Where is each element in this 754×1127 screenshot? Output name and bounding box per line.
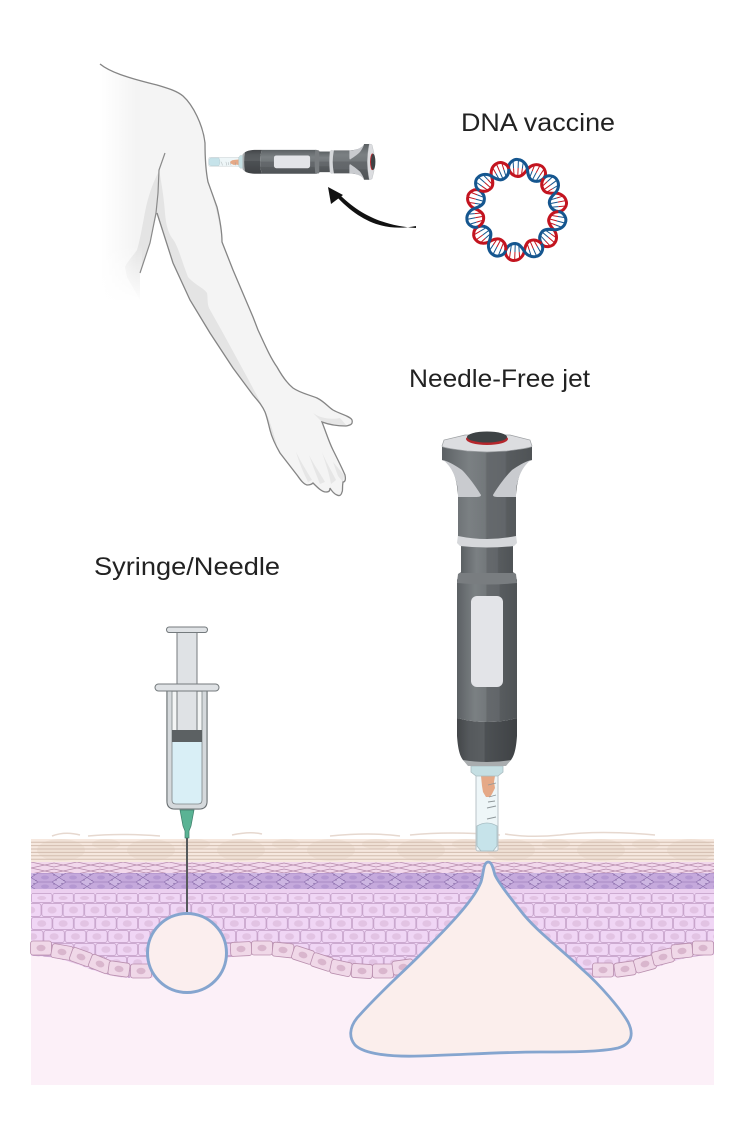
needle hub (180, 810, 194, 838)
label: Syringe/Needle: Syringe/Needle (94, 553, 280, 581)
torso shading (125, 173, 158, 300)
liquid (172, 742, 202, 804)
nozzle collar (471, 766, 503, 776)
torso left fade (92, 60, 137, 305)
needle shaft (186, 838, 188, 914)
grip collar (457, 572, 517, 584)
nozzle tube (476, 772, 498, 851)
grip lower band (457, 718, 517, 765)
window label (471, 596, 503, 687)
grip body (457, 574, 517, 722)
DNA plasmid ring (467, 158, 569, 262)
inner arm shading (157, 170, 277, 445)
basal cell row (30, 941, 714, 979)
curved arrow (328, 187, 416, 228)
arm silhouette (100, 64, 352, 496)
neck (461, 546, 513, 573)
finger flange (155, 684, 219, 691)
barrel inner outline (172, 691, 202, 804)
rubber stopper (172, 730, 202, 742)
torso bottom fade (92, 245, 142, 305)
armpit and torso line (140, 153, 165, 273)
epidermal cells (31, 889, 714, 979)
label: Needle-Free jet: Needle-Free jet (409, 365, 590, 393)
thumb rest (166, 627, 208, 632)
syringe (155, 627, 219, 914)
intradermal bleb (148, 914, 226, 992)
large needle-free jet injector (442, 432, 532, 851)
red trigger ring (466, 433, 508, 445)
head left highlight (443, 460, 481, 497)
hand shading (296, 413, 347, 484)
plunger rod (177, 631, 197, 731)
arrow head (328, 187, 343, 204)
barrel (167, 691, 207, 809)
label: DNA vaccine: DNA vaccine (461, 109, 615, 137)
bottom ring (463, 760, 511, 766)
surface skin flakes (52, 832, 655, 836)
barrel wall (168, 691, 206, 808)
trigger cap (467, 432, 507, 442)
skin cross-section (30, 832, 714, 1085)
arm outline (100, 64, 352, 496)
plunger rod inside barrel (177, 691, 197, 731)
top plate (442, 435, 532, 452)
head right highlight (493, 460, 531, 497)
dermis background (31, 955, 714, 1085)
small injector at arm (209, 144, 375, 180)
outer arm shading (207, 180, 222, 240)
stratum spinosum dark layer (31, 873, 714, 890)
arm (92, 60, 352, 496)
needle-free injection spread (351, 862, 631, 1056)
light ring (457, 535, 517, 548)
head (442, 447, 532, 539)
stratum corneum (31, 839, 714, 862)
arrow shaft (335, 192, 416, 228)
stratum granulosum (31, 862, 714, 873)
